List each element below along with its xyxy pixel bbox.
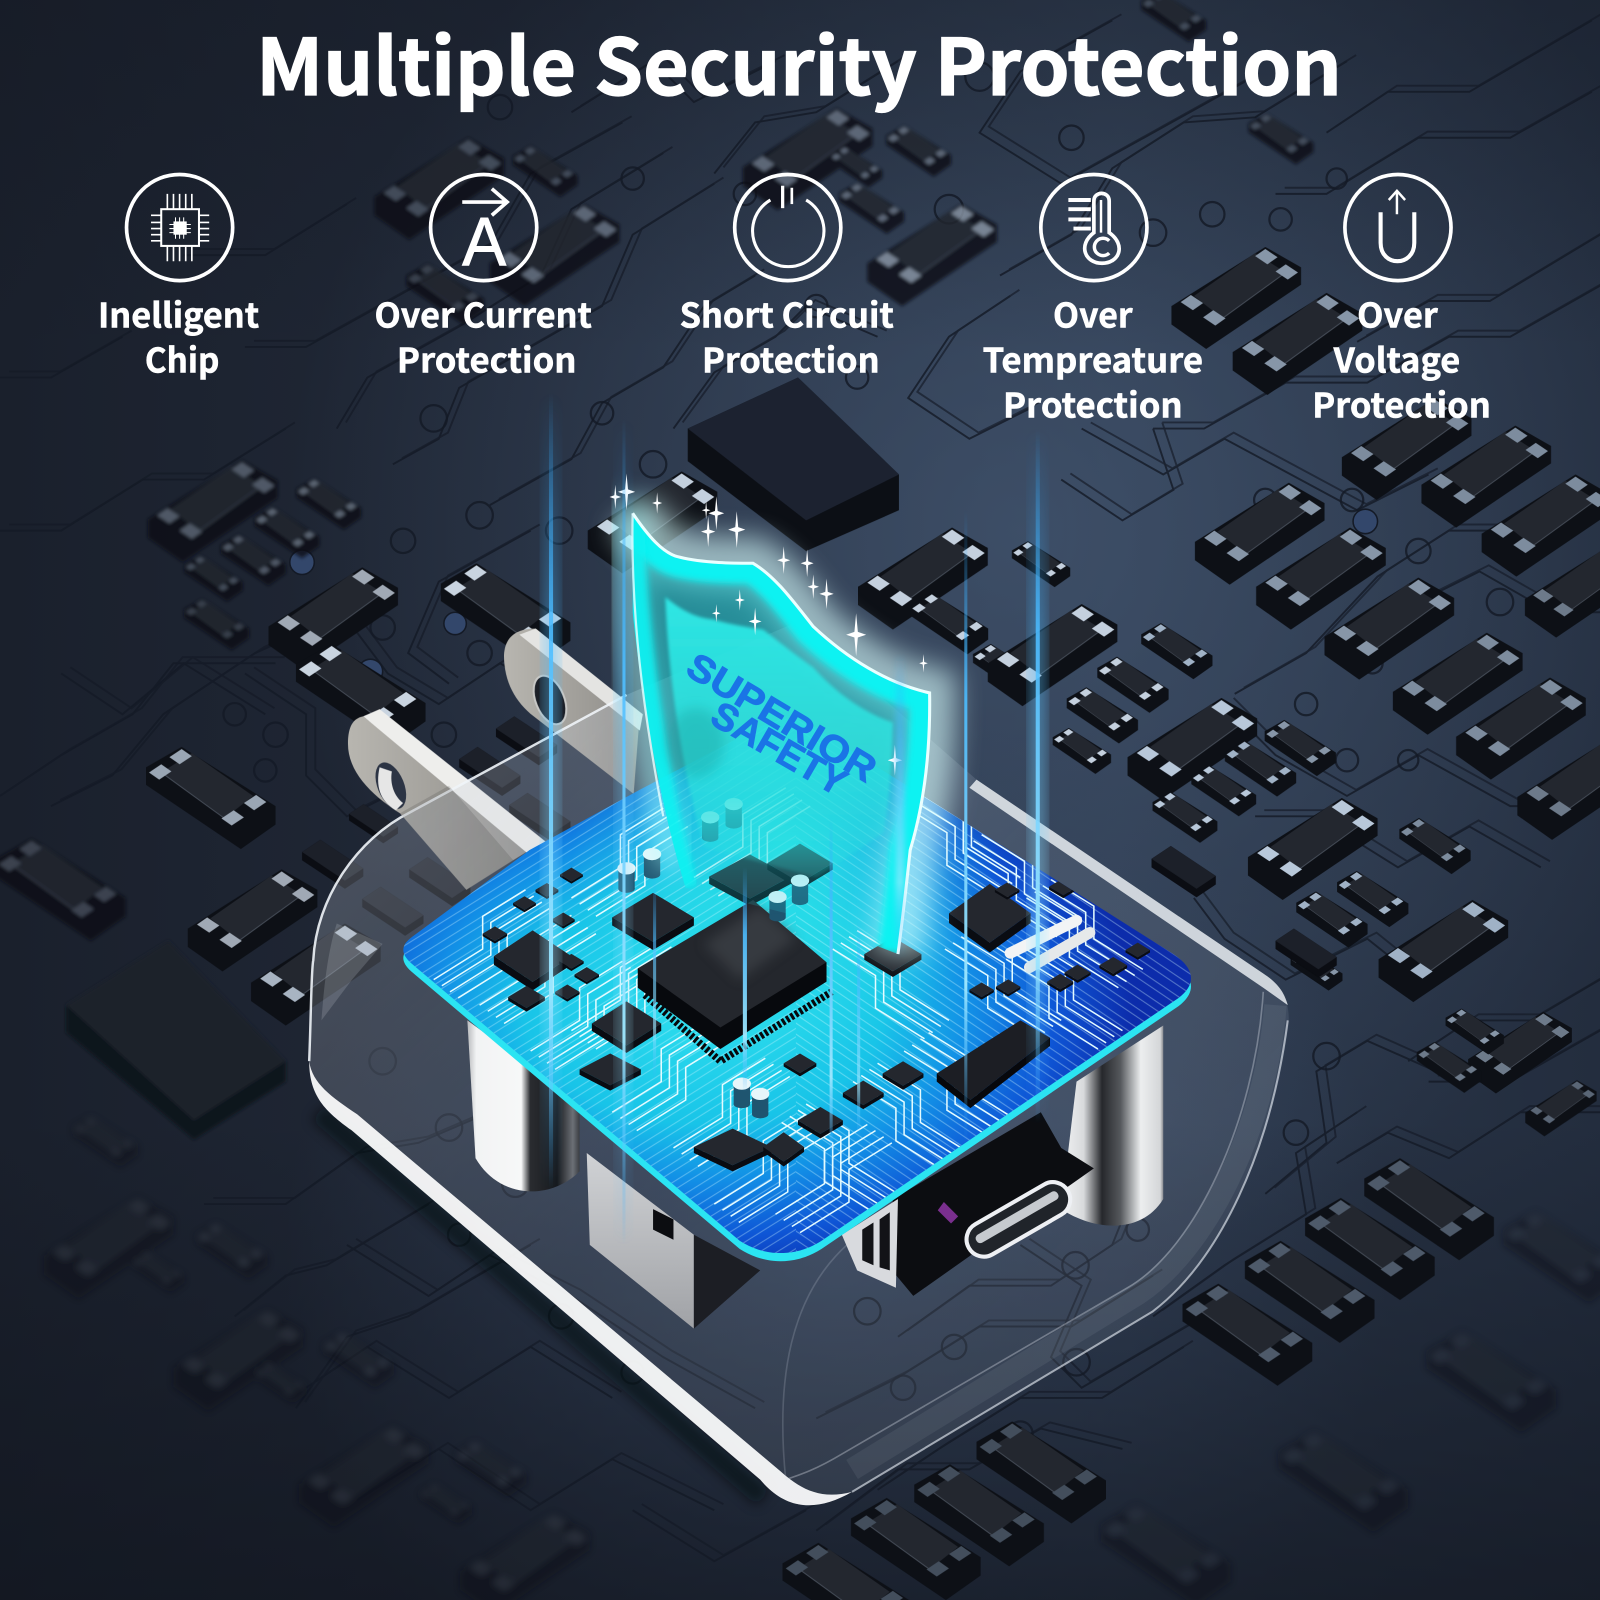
icon: short circuit power bbox=[735, 174, 841, 281]
shield text: SUPERIOR bbox=[680, 644, 884, 790]
label: over temperature protection: Tempreature bbox=[983, 333, 1203, 382]
blurred chips top bbox=[0, 0, 1313, 941]
label: over current protection bbox=[374, 289, 592, 382]
shield inner glow bbox=[633, 513, 930, 954]
label: over current protection: Over Current bbox=[374, 289, 592, 338]
title: Multiple Security Protection bbox=[256, 6, 1342, 118]
PCB trace bundles bbox=[434, 788, 1143, 1233]
icon: over current bbox=[431, 174, 537, 281]
flat block top bbox=[688, 378, 899, 551]
charger: transparent shell bbox=[309, 622, 1289, 1505]
label: over voltage protection: Voltage bbox=[1333, 333, 1460, 382]
label: over temperature protection bbox=[983, 289, 1203, 427]
icon: over voltage bbox=[1345, 174, 1451, 281]
light beams bbox=[543, 393, 1046, 1245]
label: short circuit protection: Short Circuit bbox=[680, 289, 894, 338]
USB-C connector bbox=[960, 1176, 1077, 1263]
PCB components bbox=[483, 844, 1150, 1171]
circuit pads bbox=[223, 62, 1513, 1446]
charger: transformer block bbox=[587, 1153, 760, 1329]
charger: USB-C port block bbox=[842, 1112, 1094, 1296]
label: short circuit protection: Protection bbox=[702, 333, 880, 382]
label: over voltage protection: Over bbox=[1357, 289, 1438, 338]
label: short circuit protection bbox=[680, 289, 894, 382]
silver component bbox=[1010, 920, 1090, 967]
label: intelligent chip: Inelligent bbox=[98, 289, 259, 338]
label: over current protection: Protection bbox=[397, 333, 577, 382]
icon: over current: A bbox=[462, 204, 506, 280]
main chip bbox=[638, 900, 832, 1061]
label: over voltage protection bbox=[1312, 289, 1491, 427]
label: over temperature protection: Protection bbox=[1003, 378, 1183, 427]
mid-depth chips bbox=[146, 247, 1600, 1600]
faint chips lower left bbox=[44, 1116, 1600, 1600]
label: over temperature protection: Over bbox=[1053, 289, 1133, 338]
label: over voltage protection: Protection bbox=[1312, 378, 1491, 427]
filled pads bbox=[290, 509, 1378, 684]
label: intelligent chip: Chip bbox=[145, 333, 219, 382]
PCB edge bbox=[403, 727, 1191, 1261]
charger: left chrome capacitor bbox=[467, 1020, 580, 1191]
label: intelligent chip bbox=[98, 289, 259, 382]
icon: over temperature bbox=[1041, 174, 1147, 281]
charger: rear plug prong bbox=[504, 629, 643, 794]
bright chip network bbox=[296, 471, 1508, 1054]
icon: intelligent chip bbox=[127, 174, 233, 281]
shield bbox=[629, 500, 930, 954]
charger: right chrome capacitor bbox=[1061, 1026, 1163, 1226]
capacitors bbox=[617, 798, 809, 1118]
shell shadow bbox=[318, 1112, 763, 1498]
flat block left bbox=[66, 941, 286, 1140]
charger: front plug prong bbox=[348, 709, 546, 890]
PCB board bbox=[388, 714, 1204, 1265]
shield inner panel bbox=[665, 597, 893, 878]
sparkles bbox=[610, 473, 928, 776]
shield text: SAFETY bbox=[704, 693, 854, 804]
